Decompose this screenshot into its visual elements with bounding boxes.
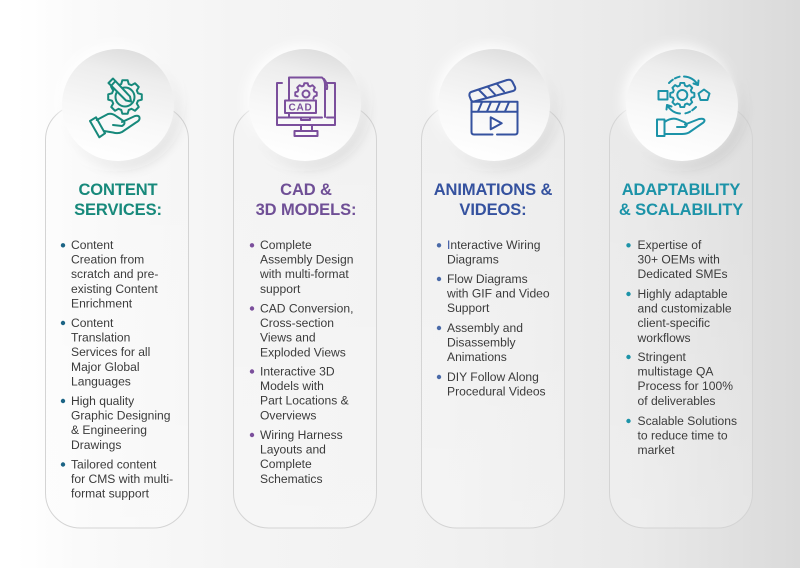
heading: ANIMATIONS &: [434, 181, 552, 199]
bullet: interactive 3D: Interactive 3D: [260, 364, 335, 378]
bullet: interactive 3D: [250, 364, 349, 422]
icon: CAD monitor: [277, 78, 335, 136]
panel: adaptability and scalability: [610, 49, 752, 528]
bullet: flow diagrams: Flow Diagrams: [447, 272, 528, 286]
bullet: assembly design: [250, 238, 353, 296]
bullet: assembly design: with multi-format: [259, 267, 349, 281]
bullet: adaptable workflows: Highly adaptable: [638, 287, 728, 301]
icon disc: [438, 49, 550, 161]
heading: & SCALABILITY: [619, 201, 743, 219]
bullet: CMS content: Tailored content: [71, 458, 157, 472]
bullet: QA process: multistage QA: [638, 365, 714, 379]
bullet: translation: Translation: [71, 331, 130, 345]
bullet: QA process: of deliverables: [638, 394, 715, 408]
bullet: graphic design: [61, 394, 170, 452]
heading: VIDEOS:: [459, 201, 527, 219]
card outline: [610, 105, 752, 528]
bullet: graphic design: Graphic Designing: [71, 409, 170, 423]
bullet: CAD conversion: CAD Conversion,: [260, 302, 353, 316]
bullet: content creation: Content: [71, 238, 114, 252]
bullet: wiring harness: [250, 428, 343, 486]
bullet: QA process: [626, 350, 733, 408]
bullet: CAD conversion: Cross-section: [260, 316, 334, 330]
card outline: [46, 105, 188, 528]
panel: CAD and 3D models: [234, 49, 376, 528]
bullet: translation: Content: [71, 316, 114, 330]
bullet: graphic design: & Engineering: [71, 423, 147, 437]
icon: gear, shapes and open hand: [657, 76, 710, 136]
bullet: content creation: scratch and pre-: [71, 267, 158, 281]
bullet: assembly animations: Disassembly: [447, 336, 517, 350]
icon disc: [626, 49, 738, 161]
bullet: OEM expertise: [626, 238, 728, 281]
bullet: QA process: Process for 100%: [638, 379, 733, 393]
bullet: OEM expertise: Expertise of: [638, 238, 702, 252]
bullet: CAD conversion: [250, 302, 353, 359]
bullet: translation: Major Global: [71, 360, 140, 374]
bullet: CMS content: format support: [71, 487, 150, 501]
icon disc: [249, 49, 361, 161]
bullet: flow diagrams: Support: [447, 301, 490, 315]
bullet: content creation: Enrichment: [71, 296, 133, 310]
bullet: DIY videos: Procedural Videos: [447, 385, 546, 399]
bullet: wiring diagrams: [437, 238, 540, 267]
icon disc: [62, 49, 174, 161]
bullet: adaptable workflows: and customizable: [638, 302, 732, 316]
bullet: adaptable workflows: [626, 287, 732, 345]
bullet: QA process: Stringent: [638, 350, 687, 364]
bullet: DIY videos: DIY Follow Along: [447, 370, 539, 384]
bullet: wiring harness: Wiring Harness: [260, 428, 343, 442]
bullet: flow diagrams: [437, 272, 550, 315]
bullet: content creation: Creation from: [71, 253, 144, 267]
bullet: OEM expertise: 30+ OEMs with: [638, 253, 720, 267]
panel: animations and videos: [422, 49, 564, 528]
bullet: scalable solutions: [626, 414, 737, 457]
heading: CAD &: [280, 181, 332, 199]
bullet: scalable solutions: to reduce time to: [638, 429, 728, 443]
bullet: translation: Services for all: [71, 345, 150, 359]
bullet: translation: Languages: [71, 374, 131, 388]
icon label: CAD: CAD: [288, 102, 313, 114]
bullet: interactive 3D: Models with: [260, 379, 324, 393]
bullet: CMS content: for CMS with multi-: [71, 472, 173, 486]
bullet: assembly animations: [437, 321, 523, 364]
bullet: adaptable workflows: workflows: [636, 331, 691, 345]
bullet: CAD conversion: Exploded Views: [260, 345, 346, 359]
panel: content services: [46, 49, 188, 528]
bullet: content creation: existing Content: [71, 282, 158, 296]
bullet: assembly design: Assembly Design: [260, 253, 353, 267]
heading: CONTENT: [78, 181, 158, 199]
bullet: assembly animations: Animations: [447, 350, 507, 364]
bullet: interactive 3D: Part Locations &: [260, 394, 349, 408]
bullet: graphic design: High quality: [71, 394, 135, 408]
bullet: graphic design: Drawings: [71, 438, 121, 452]
bullet: scalable solutions: market: [638, 443, 675, 457]
bullet: translation: [61, 316, 150, 388]
bullet: OEM expertise: Dedicated SMEs: [638, 267, 728, 281]
bullet: wiring diagrams: Interactive Wiring: [447, 238, 540, 252]
bullet: wiring harness: Layouts and: [260, 443, 326, 457]
bullet: wiring diagrams: Diagrams: [447, 253, 499, 267]
bullet: assembly design: support: [260, 282, 301, 296]
heading: SERVICES:: [74, 201, 162, 219]
icon: clapperboard: [469, 80, 518, 134]
bullet: assembly design: Complete: [260, 238, 312, 252]
bullet: content creation: [61, 238, 158, 310]
bullet: DIY videos: [437, 370, 546, 399]
icon: gear and pencil over hand: [90, 78, 142, 137]
bullet: CMS content: [61, 458, 173, 501]
card outline: [234, 105, 376, 528]
card outline: [422, 105, 564, 528]
bullet: interactive 3D: Overviews: [260, 408, 316, 422]
bullet: wiring harness: Schematics: [260, 472, 323, 486]
heading: 3D MODELS:: [256, 201, 356, 219]
bullet: CAD conversion: Views and: [260, 331, 316, 345]
bullet: adaptable workflows: client-specific: [638, 316, 710, 330]
heading: ADAPTABILITY: [622, 181, 740, 199]
bullet: assembly animations: Assembly and: [447, 321, 523, 335]
bullet: wiring harness: Complete: [260, 457, 312, 471]
bullet: flow diagrams: with GIF and Video: [446, 287, 550, 301]
bullet: scalable solutions: Scalable Solutions: [638, 414, 737, 428]
